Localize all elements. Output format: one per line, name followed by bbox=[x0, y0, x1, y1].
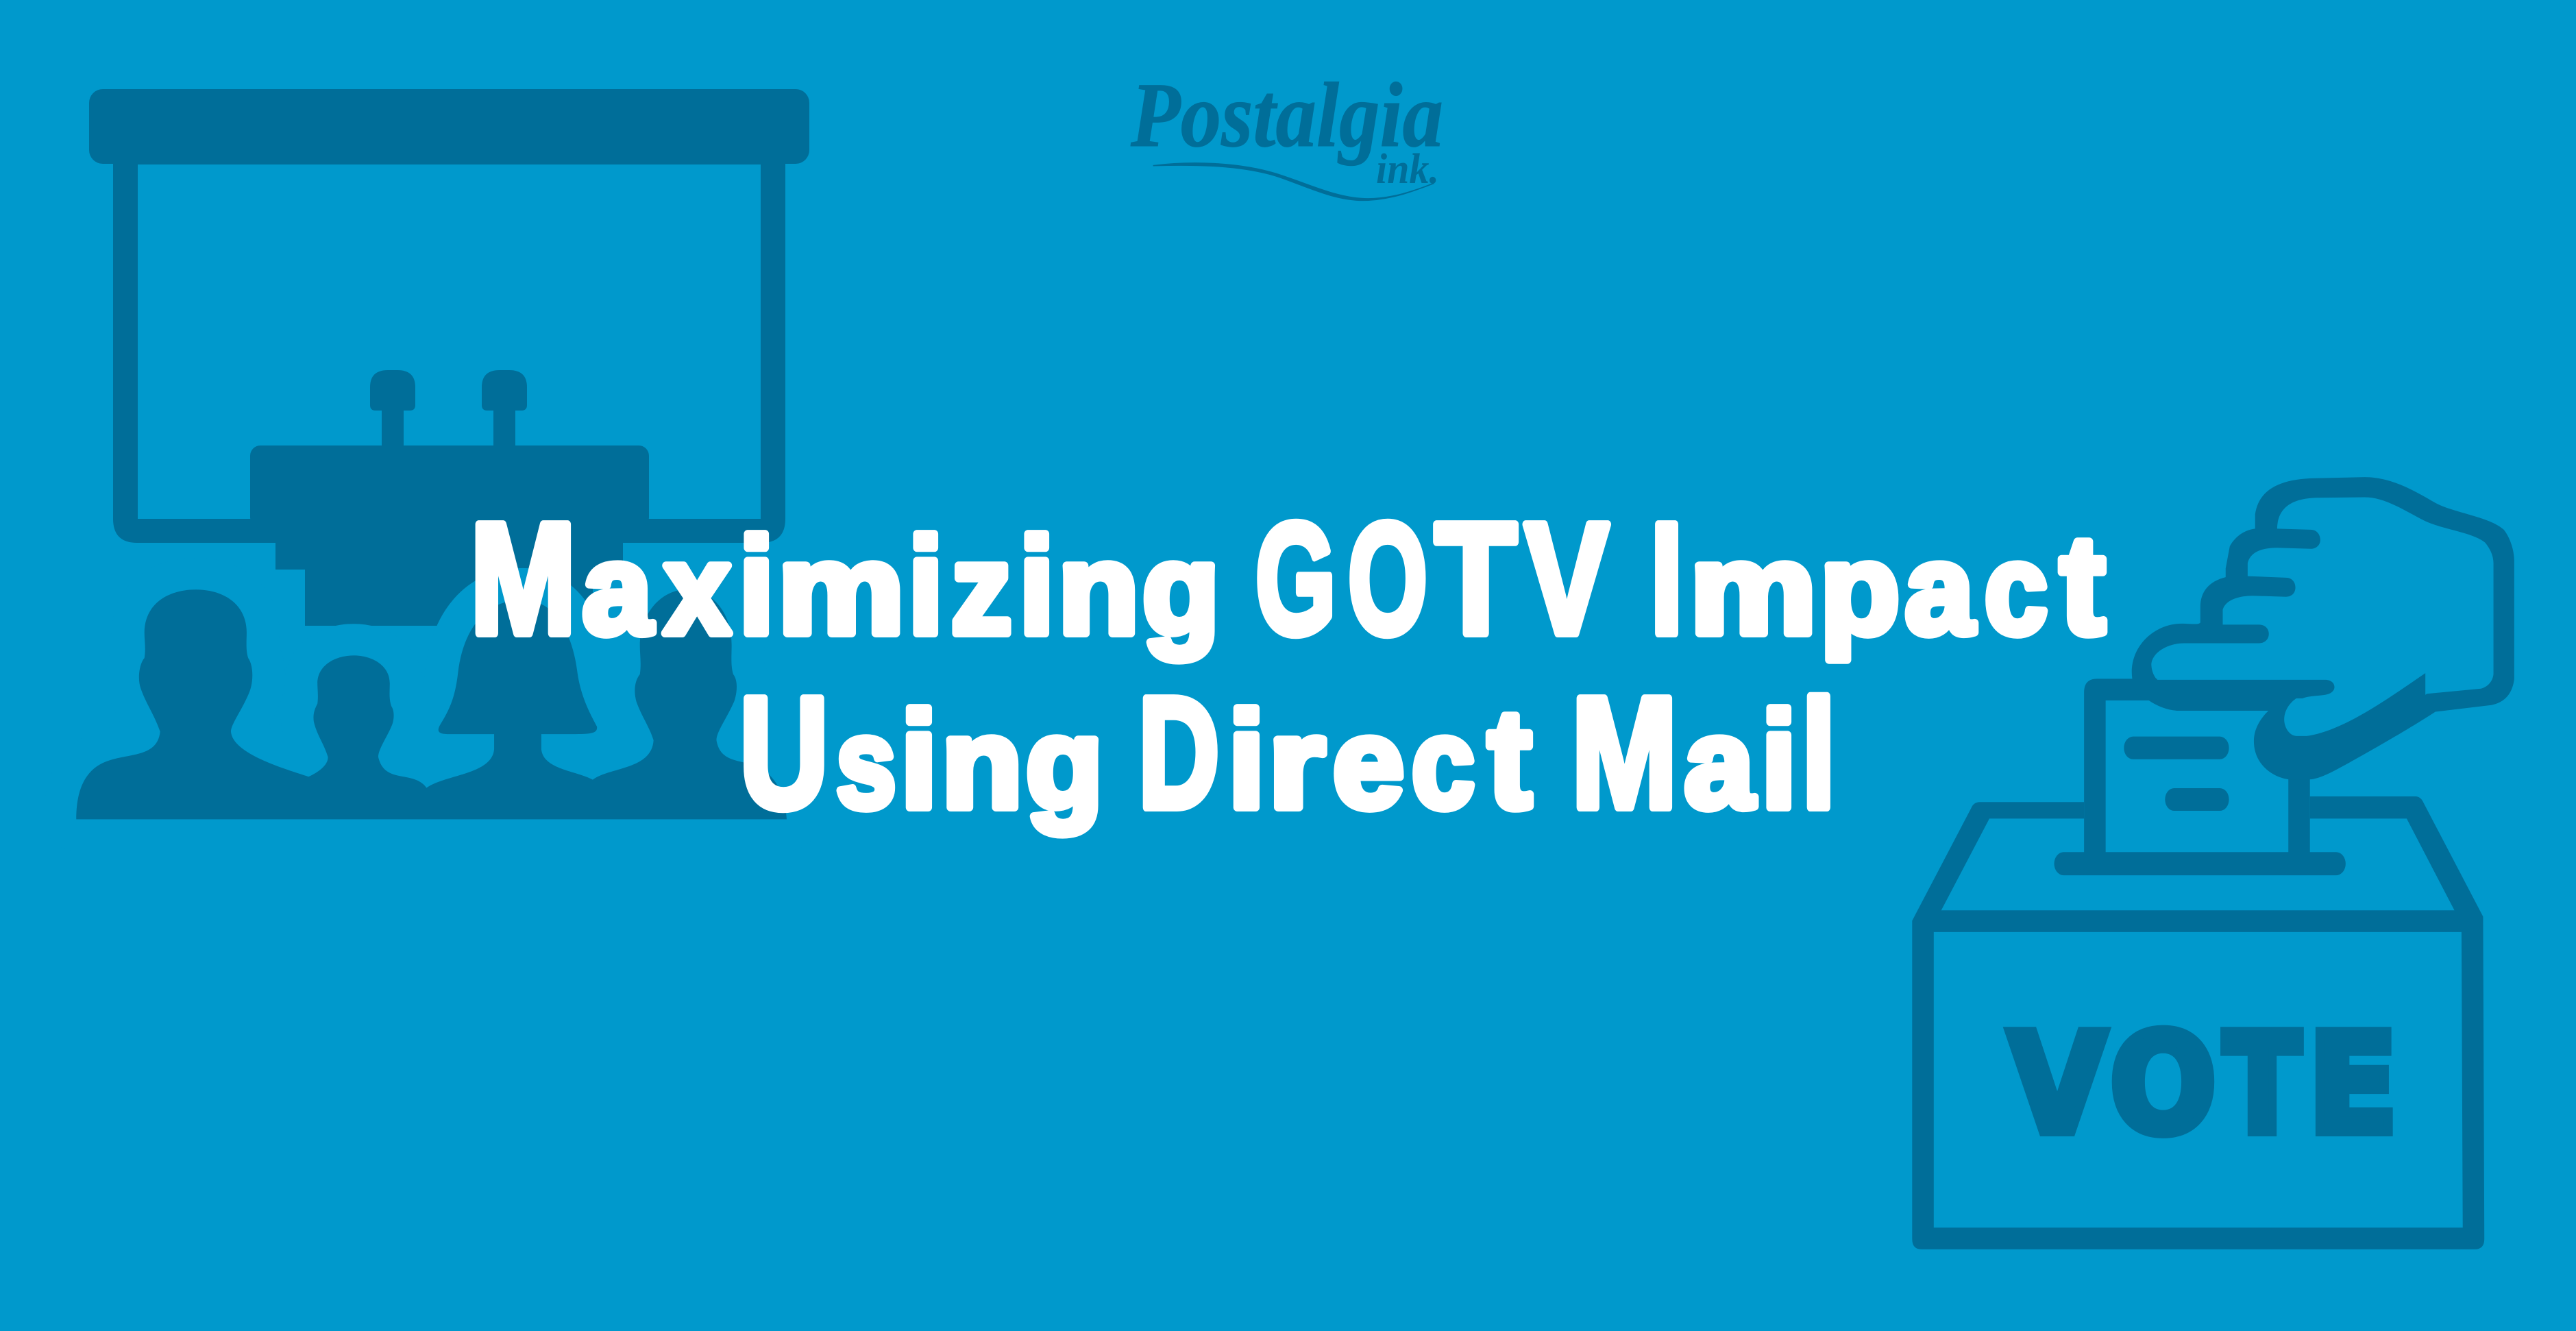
title line 1: p bbox=[1820, 517, 1900, 661]
audience silhouettes bbox=[76, 589, 787, 819]
hand outline bbox=[2132, 477, 2514, 779]
title line 1 bbox=[470, 490, 2105, 667]
podium with microphones bbox=[250, 370, 649, 626]
title line 1: O bbox=[1348, 490, 1427, 667]
screen top roller bar bbox=[89, 89, 809, 164]
title line 1: z bbox=[951, 517, 1011, 661]
ballot box label: VOTE: T bbox=[2224, 1005, 2301, 1164]
title line 2: s bbox=[836, 692, 896, 835]
title line 2: c bbox=[1412, 692, 1475, 835]
title line 1: m bbox=[778, 517, 905, 661]
title line 2: i bbox=[1761, 684, 1797, 837]
title line 1: g bbox=[1142, 517, 1220, 661]
logo sub-word: ink. bbox=[1376, 146, 1439, 193]
ballot box body and lid bbox=[1912, 796, 2484, 1249]
ballot box label: VOTE: V bbox=[2009, 1005, 2106, 1164]
title line 1: V bbox=[1525, 490, 1609, 667]
projector screen frame bbox=[113, 137, 785, 543]
title line 1: t bbox=[2060, 506, 2105, 663]
title line 1: x bbox=[664, 517, 731, 661]
title line 2: i bbox=[1228, 684, 1265, 837]
logo swoosh bbox=[1153, 163, 1434, 200]
title line 2: U bbox=[739, 664, 829, 841]
title line 2: t bbox=[1488, 681, 1532, 838]
logo wordmark: Postalgia bbox=[1130, 64, 1443, 167]
title line 1: a bbox=[1905, 517, 1975, 661]
ballot box label: VOTE bbox=[2009, 1005, 2398, 1164]
title line 2: M bbox=[1571, 664, 1678, 841]
title line 1: c bbox=[1985, 517, 2048, 661]
title line 1: G bbox=[1255, 490, 1336, 667]
title line 1: T bbox=[1435, 490, 1517, 667]
title line 2: l bbox=[1802, 669, 1836, 840]
title line 1: I bbox=[1650, 490, 1683, 667]
title line 2 bbox=[739, 664, 1836, 841]
title line 2: g bbox=[1026, 692, 1103, 835]
logo: Postalgia ink. bbox=[1130, 64, 1443, 200]
title line 1: n bbox=[1058, 517, 1139, 661]
title line 1: i bbox=[1019, 510, 1055, 663]
ballot box label: VOTE: O bbox=[2110, 1005, 2216, 1164]
title line 2: D bbox=[1138, 664, 1219, 841]
title line 1: a bbox=[582, 517, 653, 661]
title bbox=[470, 490, 2105, 841]
title line 1: i bbox=[908, 510, 944, 663]
title line 2: a bbox=[1684, 692, 1755, 835]
title line 2: i bbox=[900, 684, 937, 837]
icon: ballot box with hand casting vote bbox=[1912, 477, 2514, 1249]
ballot slot bar bbox=[2054, 852, 2346, 875]
title line 2: r bbox=[1268, 692, 1325, 835]
title line 1: m bbox=[1690, 517, 1817, 661]
title line 1: i bbox=[739, 510, 774, 663]
ballot box label: VOTE: E bbox=[2308, 1005, 2398, 1164]
icon: presentation screen with podium and audience bbox=[76, 89, 809, 819]
title line 2: n bbox=[942, 692, 1022, 835]
title line 1: M bbox=[470, 490, 576, 667]
audience halo cut-out bbox=[76, 589, 787, 819]
ballot paper bbox=[2084, 679, 2310, 855]
title line 2: e bbox=[1333, 692, 1404, 835]
